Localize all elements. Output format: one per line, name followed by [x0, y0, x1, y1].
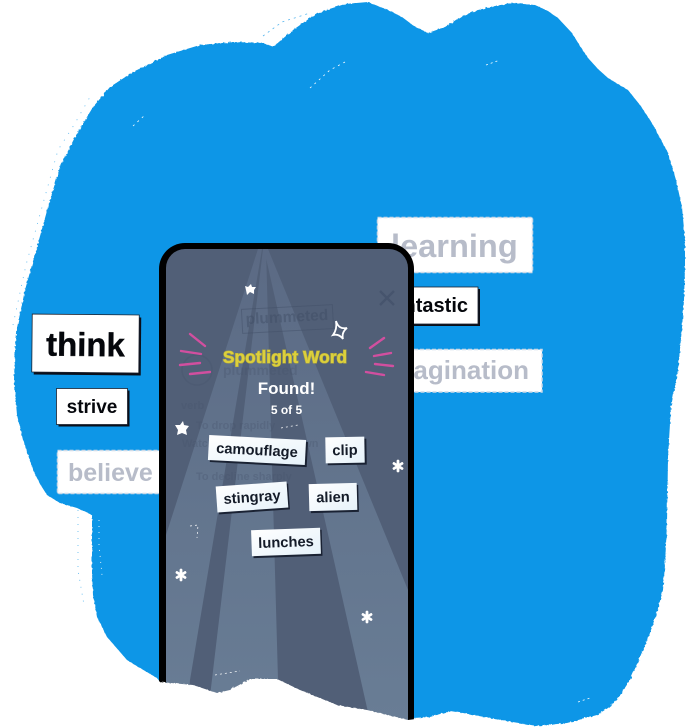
word card: imagination (faded): imagination — [383, 355, 529, 385]
sparkle — [333, 321, 347, 339]
word card: think — [32, 314, 141, 375]
chip: stingray — [216, 481, 290, 514]
word card: believe (faded) — [58, 450, 168, 494]
close icon — [380, 291, 394, 305]
pink bursts — [180, 334, 393, 375]
asterisks — [177, 461, 402, 622]
phone body — [159, 243, 414, 727]
word card: strive: strive — [67, 397, 117, 418]
torn white paper edge — [140, 677, 416, 727]
chip: clip — [325, 437, 367, 465]
word card: fantastic — [376, 287, 480, 326]
chip: alien — [309, 483, 359, 513]
word card: believe (faded): believe — [68, 459, 153, 487]
faded dictionary entry — [194, 365, 318, 480]
chip: camouflage: camouflage — [216, 441, 298, 461]
word card: imagination (faded) — [372, 350, 542, 392]
chip: stingray: stingray — [223, 488, 282, 508]
word card: fantastic: fantastic — [386, 295, 468, 317]
word card: learning (faded) — [378, 218, 532, 272]
title: Spotlight Word: Spotlight Word — [223, 347, 347, 367]
chip: alien: alien — [316, 490, 350, 506]
spotlight beams — [166, 249, 408, 727]
phone — [159, 243, 414, 727]
chip: lunches: lunches — [258, 534, 314, 552]
chip: lunches — [251, 528, 323, 558]
faded card behind overlay: plummeted — [245, 307, 329, 328]
faded dictionary entry: plummeted — [223, 362, 298, 378]
chip: camouflage — [208, 435, 308, 467]
word card: think: think — [46, 326, 126, 363]
faded dictionary entry: To decline sharply — [196, 471, 293, 483]
faded dictionary entry: To drop rapidly — [196, 420, 276, 432]
white stars — [175, 284, 256, 435]
heading: Found: Found! — [258, 379, 315, 398]
chip: clip: clip — [332, 443, 358, 459]
faded dictionary entry: Watch it fall straight down — [182, 438, 319, 450]
counter: 5 of 5 — [271, 403, 302, 417]
faded dictionary entry: verb — [181, 400, 205, 412]
word card: strive — [56, 388, 130, 426]
word card: learning (faded): learning — [391, 227, 518, 264]
phone screen — [166, 249, 408, 727]
